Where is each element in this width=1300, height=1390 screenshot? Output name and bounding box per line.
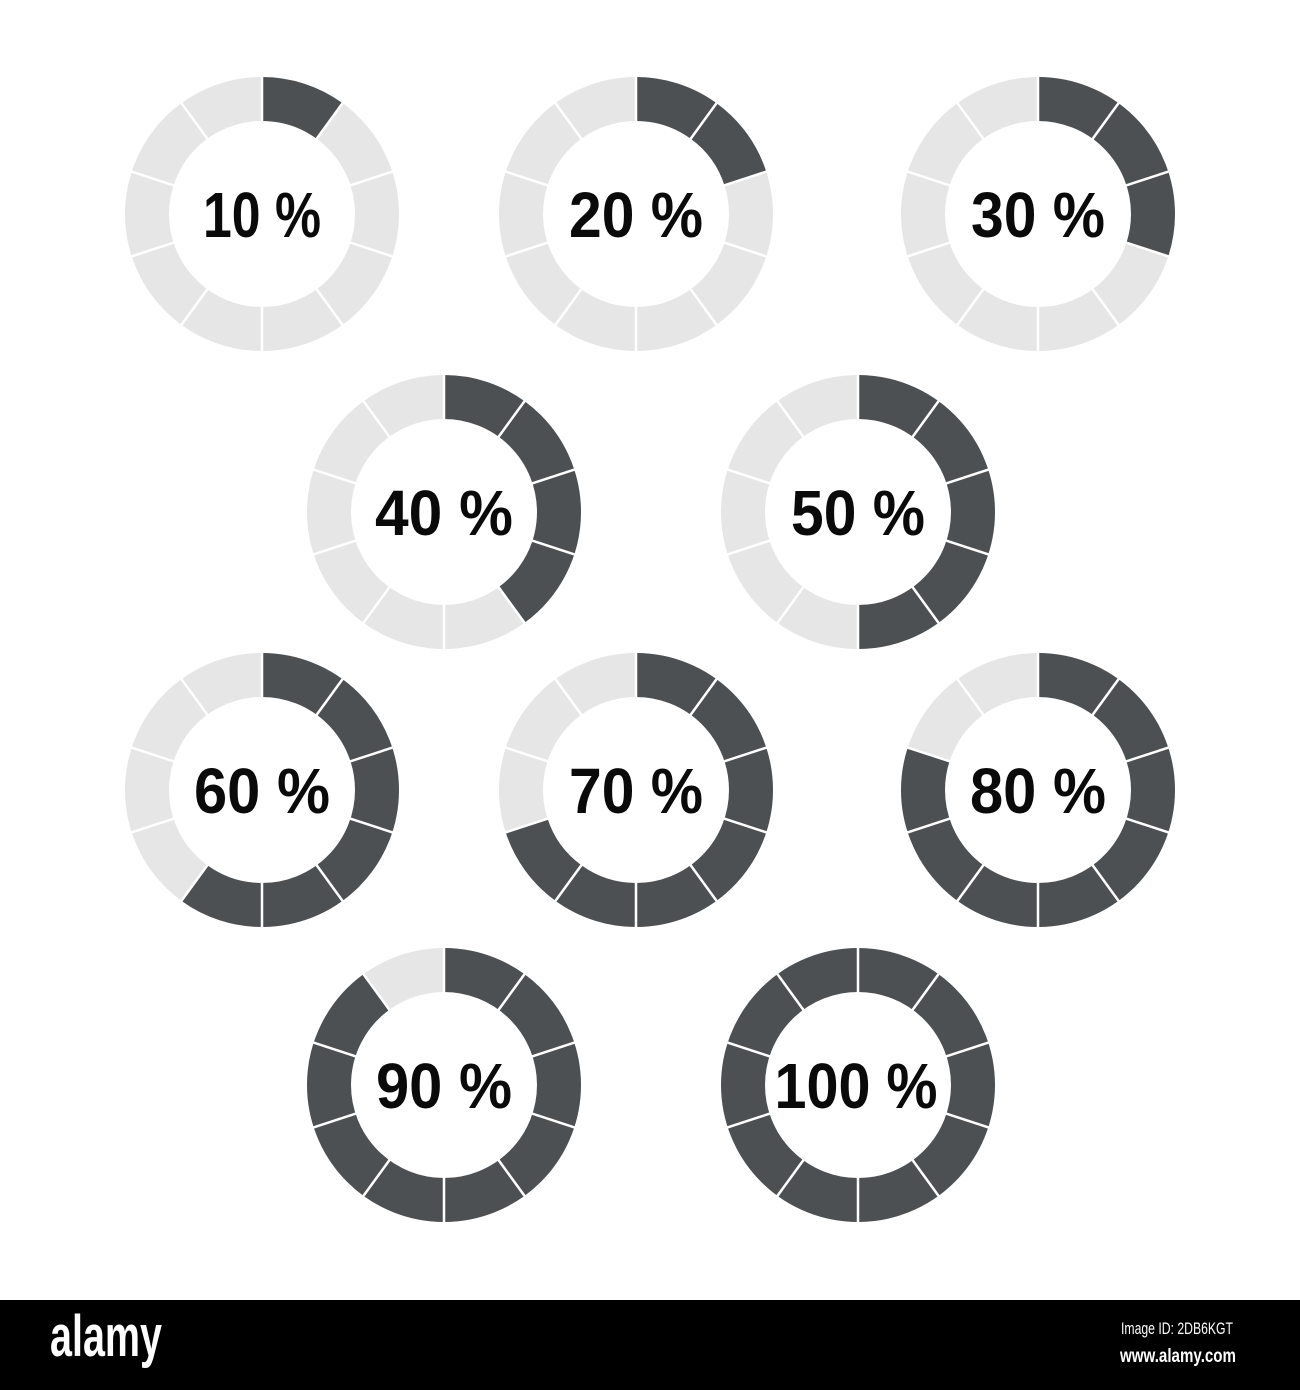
website: www.alamy.com [1119,1346,1236,1367]
chart: 40%: 40 % [375,477,513,549]
chart: 60% [129,650,395,930]
chart: 50% [725,372,991,652]
image id: Image ID: 2DB6KGT [1121,1319,1233,1338]
chart: 90% [311,945,577,1225]
chart: 30%: 30 % [971,179,1105,251]
chart: 40% [311,372,577,652]
chart: 10% [129,74,395,354]
chart: 100%: 100 % [774,1050,938,1122]
chart: 50%: 50 % [791,477,925,549]
chart: 20% [503,74,769,354]
chart: 30% [905,74,1171,354]
chart: 100% [725,945,991,1225]
chart: 80% [905,650,1171,930]
chart: 80%: 80 % [970,755,1106,827]
chart: 70% [503,650,769,930]
chart: 60%: 60 % [194,755,330,827]
chart: 20%: 20 % [569,179,703,251]
chart: 70%: 70 % [569,755,703,827]
footer banner [0,1300,1300,1390]
logo: alamy: alamy [50,1304,162,1369]
chart: 10%: 10 % [203,179,321,251]
chart: 90%: 90 % [376,1050,512,1122]
